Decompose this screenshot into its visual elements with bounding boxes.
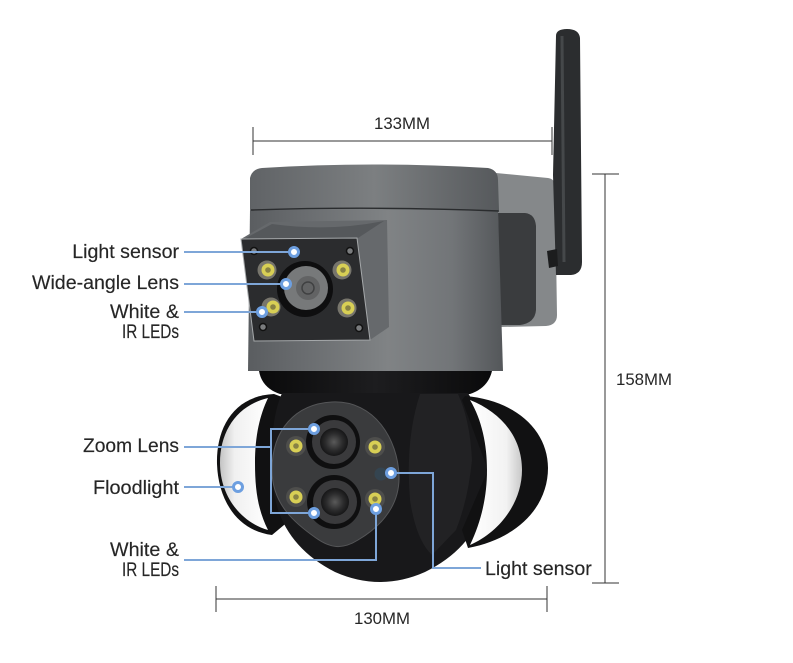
- left floodlight: [217, 394, 290, 535]
- label: floodlight: Floodlight: [93, 477, 180, 499]
- lower black dome: [272, 393, 488, 582]
- dimension: 158MM: 158MM: [616, 370, 672, 389]
- dimension: 158MM: [592, 174, 672, 583]
- dimension: 130MM: 130MM: [354, 609, 410, 628]
- label: white and IR LEDs bottom: IR LEDs: [122, 559, 179, 581]
- label: light sensor top: Light sensor: [72, 241, 179, 263]
- label: wide-angle lens: Wide-angle Lens: [32, 272, 179, 294]
- dimension: 130MM: [216, 586, 547, 628]
- icon: antenna: [547, 29, 582, 275]
- label: zoom lens: Zoom Lens: [83, 435, 179, 457]
- icon: wide-angle lens: [277, 261, 333, 317]
- label: light sensor bottom: Light sensor: [485, 558, 592, 580]
- label: white and IR LEDs top: [110, 301, 179, 343]
- lens faceplate: [272, 402, 399, 547]
- dimension: 133MM: [253, 114, 552, 155]
- icon: zoom lens lower: [307, 475, 361, 529]
- icon: lower LEDs: [286, 436, 385, 509]
- icon: zoom lens upper: [306, 415, 360, 469]
- icon: LEDs: [258, 260, 356, 318]
- upper grey housing: [248, 164, 503, 371]
- camera module: wide-angle: [241, 220, 389, 341]
- label: white and IR LEDs top: IR LEDs: [122, 321, 179, 343]
- screws: [250, 248, 362, 332]
- callout dots: [234, 248, 396, 518]
- label: white and IR LEDs bottom: White &: [110, 539, 179, 561]
- right floodlight: [462, 396, 548, 548]
- neck: [259, 371, 492, 394]
- dimension: 133MM: 133MM: [374, 114, 430, 133]
- callout lines: [184, 252, 481, 568]
- label: white and IR LEDs bottom: [110, 539, 179, 581]
- mount bracket: [496, 173, 557, 327]
- label: white and IR LEDs top: White &: [110, 301, 179, 323]
- icon: light sensor: [374, 468, 388, 480]
